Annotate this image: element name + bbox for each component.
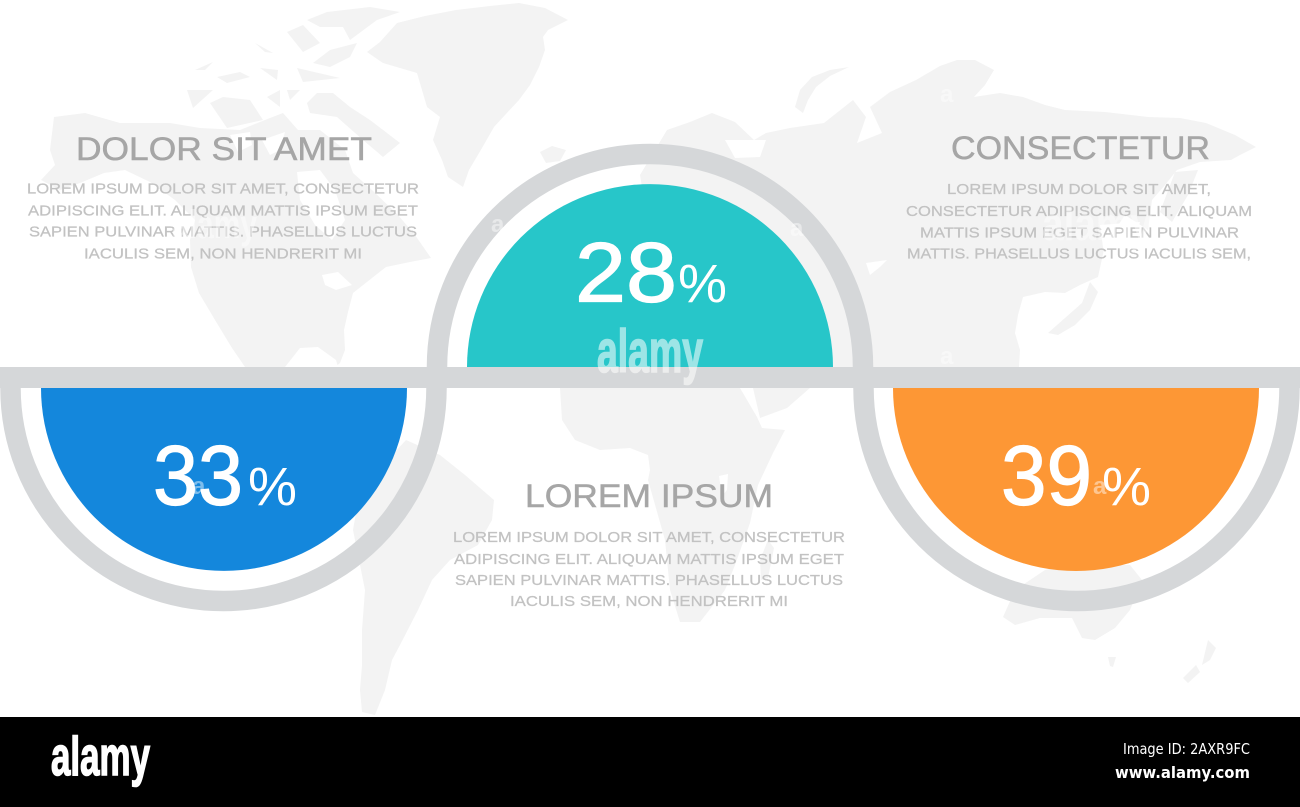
footer bar: [0, 717, 1300, 807]
paragraph: center: IACULIS SEM, NON HENDRERIT MI: [510, 593, 788, 610]
map: eurasia: [640, 60, 1256, 367]
map: novaya zemlya: [795, 67, 849, 113]
footer background: [0, 717, 1300, 807]
paragraph: left: IACULIS SEM, NON HENDRERIT MI: [84, 246, 362, 262]
horizontal bar: [0, 367, 1300, 388]
map: africa: [560, 388, 785, 622]
paragraph: left: SAPIEN PULVINAR MATTIS. PHASELLUS LUCTUS: [29, 224, 417, 240]
map: kamchatka: [1160, 170, 1198, 222]
value: 39 percent: 39: [1001, 428, 1092, 522]
image id: Image ID: 2AXR9FC: [1123, 740, 1250, 758]
paragraph: left: LOREM IPSUM DOLOR SIT AMET, CONSECTETUR: [27, 180, 419, 198]
map: canadian islands: [187, 7, 400, 157]
segment: blue 33 percent: [41, 388, 407, 571]
ring: top center: [437, 154, 863, 367]
map: greenland: [367, 3, 568, 187]
value: 39 percent: [1001, 428, 1151, 522]
watermark marks: [172, 81, 1152, 500]
ring and bar connector: [0, 154, 1300, 601]
paragraph: center: LOREM IPSUM DOLOR SIT AMET, CONSECTETUR: [453, 529, 845, 546]
map: iceland: [540, 146, 566, 163]
segment: orange 39 percent: [893, 388, 1259, 571]
value: 33 percent: %: [248, 457, 297, 517]
value: 39 percent: %: [1102, 457, 1151, 517]
map: madagascar: [760, 540, 774, 580]
right heading and text: [906, 130, 1252, 262]
map: tasmania: [1108, 657, 1116, 667]
paragraph: right: CONSECTETUR ADIPISCING ELIT. ALIQUAM: [906, 203, 1252, 220]
paragraph: right: MATTIS IPSUM EGET SAPIEN PULVINAR: [920, 224, 1239, 242]
map: australia: [1003, 562, 1142, 640]
map: north america: [41, 113, 431, 367]
heading: lorem ipsum: LOREM IPSUM: [525, 478, 773, 514]
paragraph: right: [906, 181, 1252, 262]
ring: bottom left: [10, 388, 437, 601]
map: water details: [230, 132, 1140, 496]
watermark: small letters: a: [1093, 473, 1107, 500]
value: 28 percent: 28: [575, 226, 677, 320]
blue half circle: [41, 388, 407, 571]
value: 28 percent: %: [678, 254, 727, 314]
left heading and text: [27, 131, 419, 262]
watermark: small letters: a: [491, 211, 505, 238]
segment: teal 28 percent: [467, 184, 833, 367]
paragraph: left: [27, 180, 419, 262]
website: www.alamy.com: [1115, 763, 1250, 782]
watermark: small letters: [192, 81, 1107, 500]
map: japan: [1048, 282, 1098, 335]
paragraph: left: ADIPISCING ELIT. ALIQUAM MATTIS IPSUM EGET: [28, 202, 418, 220]
paragraph: right: MATTIS. PHASELLUS LUCTUS IACULIS SEM,: [907, 246, 1251, 262]
paragraph: center: ADIPISCING ELIT. ALIQUAM MATTIS IPSUM EGET: [454, 551, 844, 568]
logo: alamy: alamy: [51, 725, 150, 787]
map: new zealand: [1183, 640, 1216, 683]
paragraph: center: [453, 529, 845, 610]
ring: bottom right: [864, 388, 1290, 601]
teal half circle: [467, 184, 833, 367]
heading: dolor sit amet: DOLOR SIT AMET: [76, 131, 372, 167]
value: 33 percent: 33: [153, 428, 243, 522]
orange half circle: [893, 388, 1259, 571]
watermark: right text: alamy: [1042, 198, 1152, 250]
map: arabia: [753, 388, 810, 418]
map: south america: [353, 440, 494, 715]
watermark: center: alamy: [597, 318, 703, 385]
paragraph: center: SAPIEN PULVINAR MATTIS. PHASELLUS LUCTUS: [455, 572, 843, 589]
watermark: small letters: a: [790, 215, 804, 242]
watermark: left text: alamy: [172, 203, 258, 247]
watermark: small letters: a: [940, 343, 954, 370]
paragraph: right: LOREM IPSUM DOLOR SIT AMET,: [947, 181, 1211, 198]
value: 33 percent: [153, 428, 297, 522]
watermark: small letters: a: [940, 81, 954, 108]
bottom center heading and text: [453, 478, 845, 610]
value: 28 percent: [575, 226, 727, 320]
heading: consectetur: CONSECTETUR: [951, 130, 1210, 166]
watermark: small letters: a: [192, 473, 206, 500]
